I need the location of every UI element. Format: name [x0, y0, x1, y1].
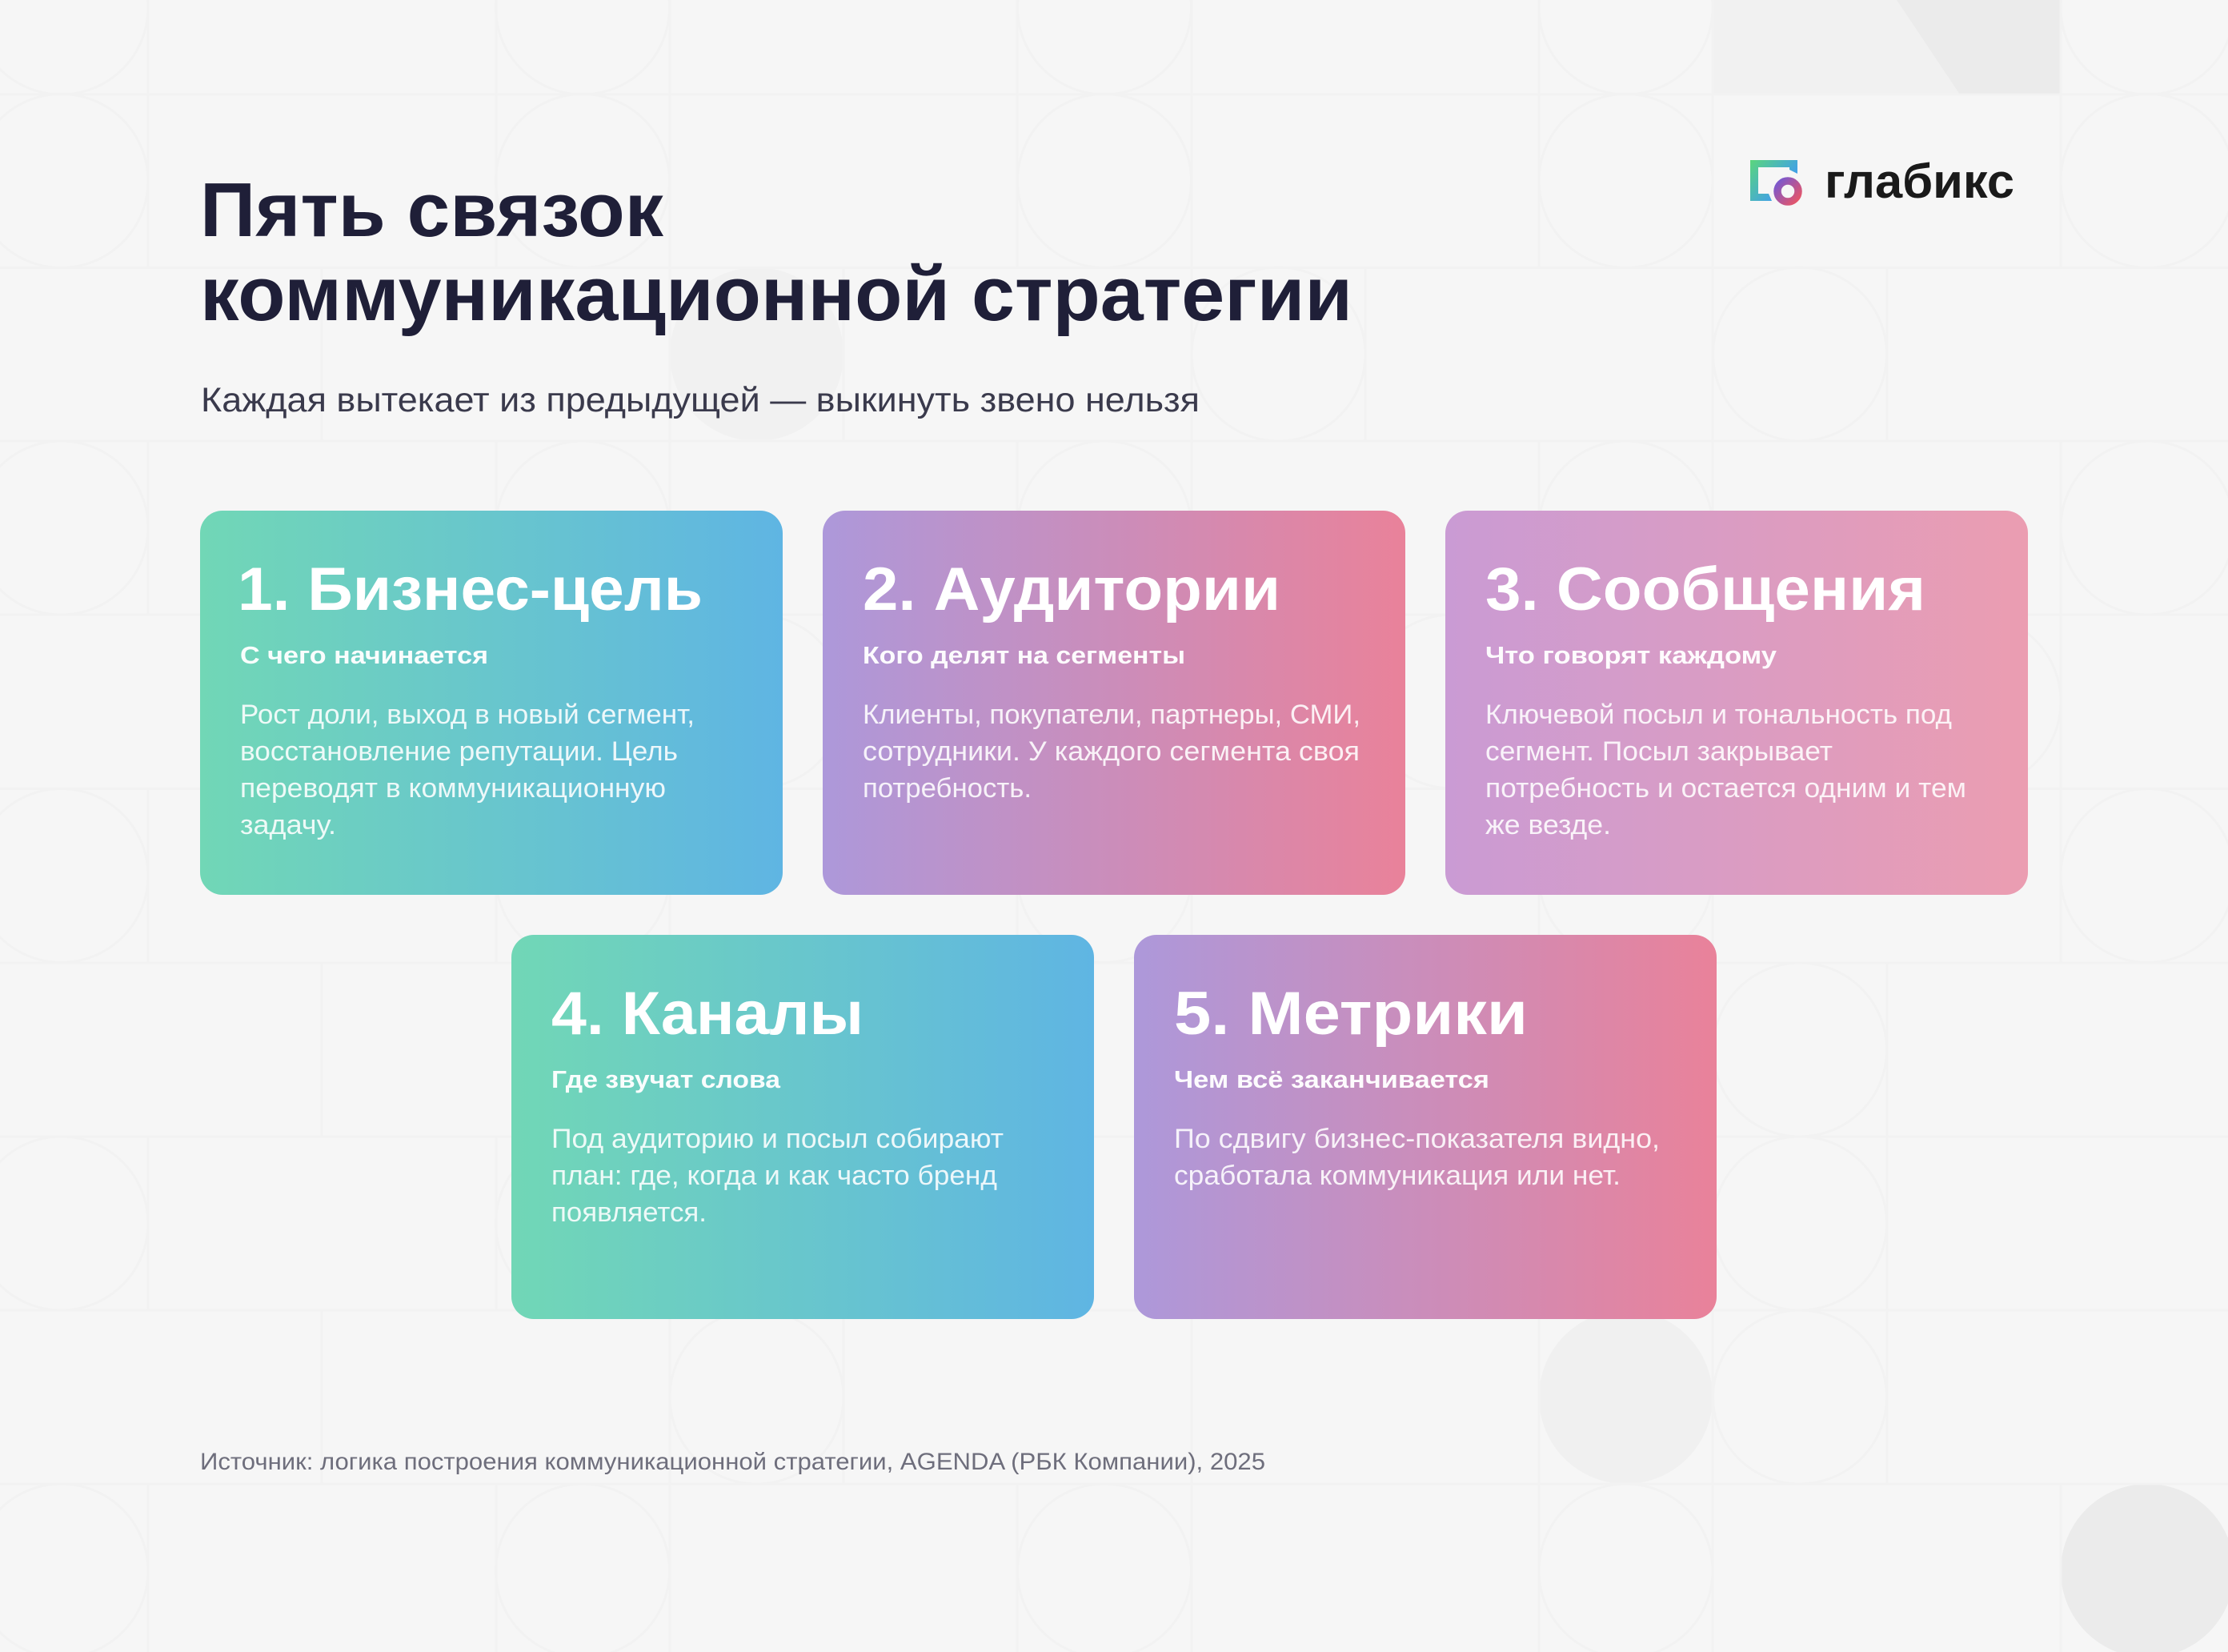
panel: card 2 audiences: потребность.	[863, 773, 1032, 804]
panel: card 5 metrics: По сдвигу бизнес-показателя видно,	[1174, 1124, 1660, 1154]
panel: card 3 messages: Что говорят каждому	[1485, 641, 1777, 669]
panel: card 5 metrics: 5. Метрики	[1174, 980, 1528, 1048]
panel: card 4 channels: план: где, когда и как часто бренд	[551, 1161, 997, 1191]
title: коммуникационной стратегии	[200, 251, 1352, 337]
subtitle: Каждая вытекает из предыдущей — выкинуть звено нельзя	[201, 381, 1200, 419]
panel: card 2 audiences: Клиенты, покупатели, партнеры, СМИ,	[863, 700, 1360, 730]
panel: card 1 business goal: задачу.	[240, 810, 336, 840]
panel: card 5 metrics: сработала коммуникация или нет.	[1174, 1161, 1621, 1191]
panel: card 4 channels: 4. Каналы	[551, 980, 864, 1048]
panel: card 2 audiences	[823, 511, 1405, 895]
source footnote: Источник: логика построения коммуникационной стратегии, AGENDA (РБК Компании), 2025	[200, 1449, 1265, 1475]
title: Пять связок	[200, 167, 664, 253]
panel: card 2 audiences: сотрудники. У каждого сегмента своя	[863, 736, 1360, 767]
panel: card 3 messages: потребность и остается одним и тем	[1485, 773, 1966, 804]
panel: card 1 business goal: Рост доли, выход в новый сегмент,	[240, 700, 695, 730]
title	[200, 167, 1352, 337]
panel: card 5 metrics: Чем всё заканчивается	[1174, 1065, 1489, 1093]
panel: card 4 channels: Где звучат слова	[551, 1065, 781, 1093]
icon: logo mark	[1750, 160, 1798, 202]
logo	[1750, 154, 2014, 208]
panel: card 3 messages: 3. Сообщения	[1485, 555, 1925, 624]
logo wordmark: глабикс	[1825, 154, 2014, 208]
panel: card 4 channels: Под аудиторию и посыл собирают	[551, 1124, 1004, 1154]
panel: card 1 business goal: переводят в коммуникационную	[240, 773, 666, 804]
panel: card 2 audiences: 2. Аудитории	[863, 555, 1280, 624]
panel: card 3 messages: Ключевой посыл и тональность под	[1485, 700, 1952, 730]
panel: card 3 messages	[1445, 511, 2028, 895]
panel: card 1 business goal: С чего начинается	[240, 641, 488, 669]
panel: card 4 channels: появляется.	[551, 1197, 707, 1228]
panel: card 5 metrics	[1134, 935, 1717, 1319]
panel: card 3 messages: сегмент. Посыл закрывает	[1485, 736, 1833, 767]
panel: card 4 channels	[511, 935, 1094, 1319]
panel: card 1 business goal: 1. Бизнес-цель	[238, 555, 703, 624]
panel: card 2 audiences: Кого делят на сегменты	[863, 641, 1185, 669]
panel: card 1 business goal	[200, 511, 783, 895]
panel: card 1 business goal: восстановление репутации. Цель	[240, 736, 678, 767]
panel: card 3 messages: же везде.	[1485, 810, 1611, 840]
